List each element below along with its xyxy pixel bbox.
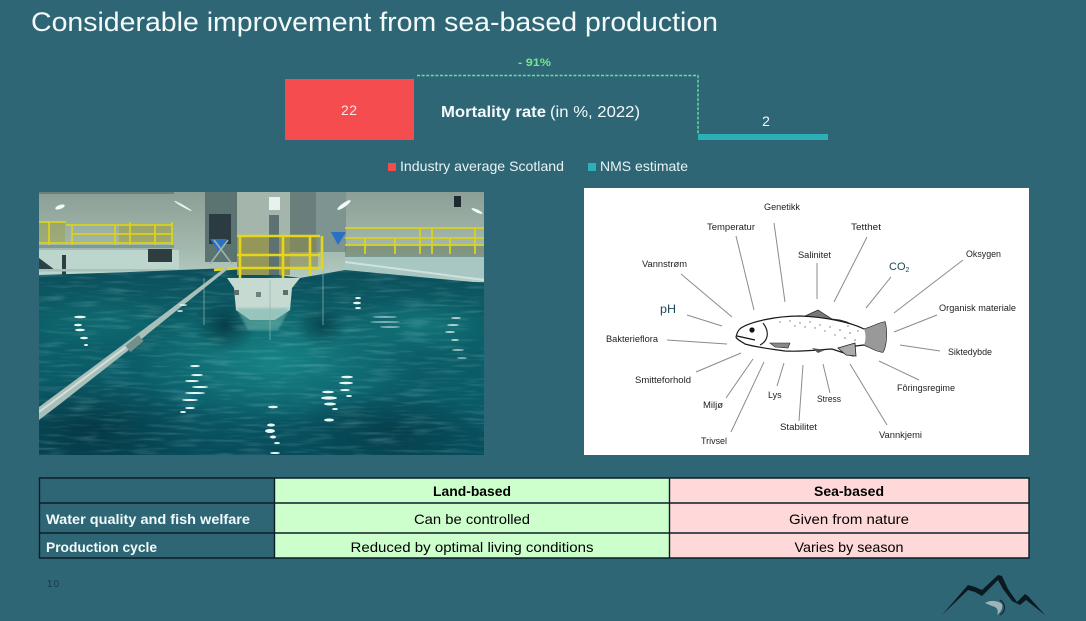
row: production cycle: Production cycle <box>46 539 157 555</box>
diagram: factors affecting fish welfare <box>584 188 1029 455</box>
connector lines <box>667 223 963 432</box>
row: water quality <box>46 511 909 527</box>
factor labels: 2 <box>906 267 910 274</box>
centre column railing <box>237 235 290 275</box>
bar: NMS estimate <box>698 113 828 140</box>
factor labels: Stress <box>817 394 841 404</box>
bar: industry average Scotland: 22 <box>341 102 357 118</box>
legend <box>388 158 688 174</box>
table header: Sea-based <box>814 483 884 499</box>
factor labels: CO <box>889 261 906 273</box>
photo: land-based fish tank <box>39 192 484 455</box>
factor labels: Trivsel <box>701 436 727 446</box>
legend: Industry average Scotland <box>400 158 564 174</box>
row: production cycle: Varies by season <box>794 539 904 555</box>
row: water quality: Given from nature <box>789 511 909 527</box>
blue hoppers <box>210 239 227 252</box>
row: production cycle <box>46 539 904 555</box>
deck right <box>345 262 484 280</box>
bar: industry average Scotland <box>285 79 414 140</box>
factor labels: Stabilitet <box>780 422 818 432</box>
icon: fish <box>736 310 886 356</box>
land-based column fill <box>274 478 669 558</box>
factor labels <box>606 202 1016 446</box>
factor labels: Temperatur <box>707 222 755 232</box>
legend: NMS estimate <box>600 158 688 174</box>
factor labels: Tetthet <box>851 222 882 232</box>
factor labels: Genetikk <box>764 202 800 212</box>
vertical poles <box>204 270 323 340</box>
factor labels: Oksygen <box>966 249 1001 259</box>
yellow railing right <box>345 246 484 255</box>
logo: mountain with fish <box>942 575 1045 615</box>
factor labels: Organisk materiale <box>939 303 1016 313</box>
comparison table <box>40 478 1029 558</box>
pipe <box>39 267 228 420</box>
factor labels: Bakterieflora <box>606 334 658 344</box>
factor labels: Vannstrøm <box>642 259 687 269</box>
table grid <box>40 478 1029 558</box>
reduction label: - 91% <box>518 57 551 69</box>
factor labels: Miljø <box>703 400 724 410</box>
factor labels: Siktedybde <box>948 347 992 357</box>
factor labels: Vannkjemi <box>879 430 922 440</box>
sparkles <box>74 297 467 454</box>
factor labels: Lys <box>768 390 782 400</box>
diagram panel <box>584 188 1029 455</box>
row: production cycle: Reduced by optimal living conditions <box>350 539 594 555</box>
reduction bracket <box>417 76 698 134</box>
water <box>39 268 484 455</box>
yellow railing left <box>119 224 171 244</box>
factor labels: Salinitet <box>798 250 832 260</box>
factor labels: pH <box>660 302 676 316</box>
title: Considerable improvement from sea-based production <box>31 7 718 37</box>
sea-based column fill <box>669 478 1029 558</box>
deck left <box>39 245 174 248</box>
bar chart: mortality rate <box>285 57 828 140</box>
factor labels: Smitteforhold <box>635 375 691 385</box>
row: water quality: Can be controlled <box>414 511 530 527</box>
chart heading: (in %, 2022) <box>550 104 640 121</box>
page number: 10 <box>47 579 59 590</box>
factor labels: Fôringsregime <box>897 383 955 393</box>
table header: Land-based <box>433 483 511 499</box>
chart heading: Mortality rate <box>441 104 546 121</box>
submerged platform <box>227 278 300 320</box>
row: water quality: Water quality and fish welfare <box>46 511 250 527</box>
bar: NMS estimate: 2 <box>762 113 770 129</box>
table header <box>433 483 884 499</box>
